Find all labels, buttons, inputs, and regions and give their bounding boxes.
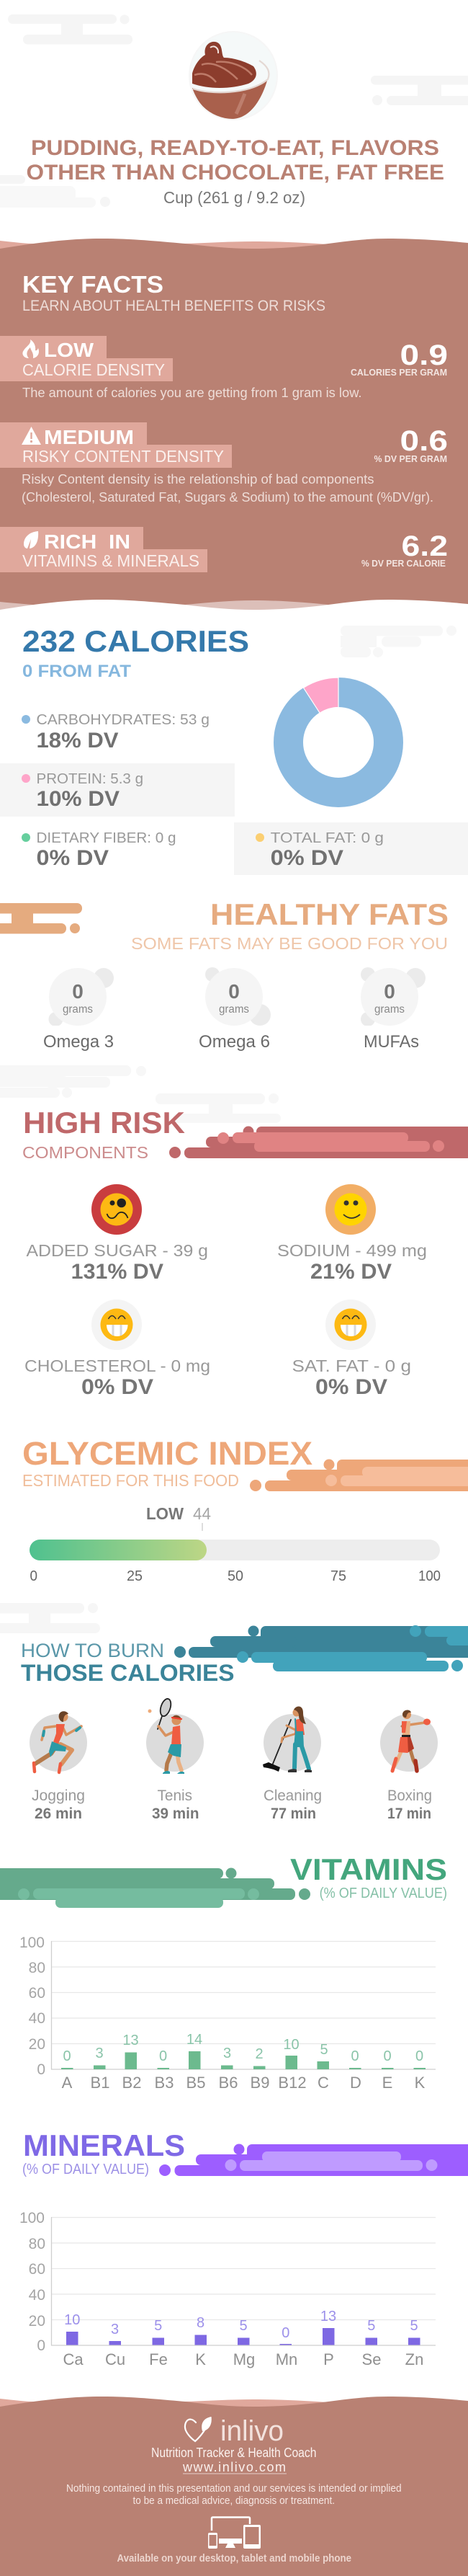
activity: cleaning: Cleaning [264,1787,322,1804]
bar chart: vitamins: 10 [283,2037,300,2053]
stat: omega 6 [199,967,271,1052]
bar chart: minerals: Fe [149,2350,168,2368]
stat: dv per gram [374,425,448,464]
stat: dv per gram: % DV PER GRAM [374,453,447,464]
component: saturated fat: SAT. FAT - 0 g [292,1356,411,1375]
subheading: glycemic index: ESTIMATED FOR THIS FOOD [22,1471,239,1490]
heading: how to burn: HOW TO BURN [21,1640,164,1661]
bar chart: vitamins: E [382,2074,392,2092]
rich in vitamins and minerals [0,527,207,572]
bar chart: minerals [19,2210,436,2368]
bar chart: vitamins: B12 [278,2074,307,2092]
bar chart: minerals: P [323,2350,334,2368]
activity: cleaning: 77 min [271,1806,316,1822]
icon: person sweeping [263,1706,321,1772]
bar chart: minerals: 8 [197,2315,204,2331]
bar chart: minerals: 13 [320,2309,336,2324]
disclaimer: Nothing contained in this presentation and our services is intended or implied [66,2483,402,2495]
stat: dv per gram: 0.6 [400,425,448,457]
bar chart: vitamins: D [350,2074,361,2092]
component: sodium: SODIUM - 499 mg [277,1241,427,1260]
legend: dietary fiber: 0% DV [36,846,109,870]
gauge: glycemic index: 44 [193,1504,211,1523]
label: rich in: RICH IN [44,530,130,553]
stat: omega 3 [43,968,114,1052]
text: risky content note: Risky Content density is the relationship of bad components [22,472,374,487]
icon: devices [208,2517,261,2549]
bar chart: minerals: Zn [405,2350,423,2368]
bar chart: vitamins: B9 [251,2074,269,2092]
stat: calories per gram [351,339,448,378]
component: added sugar: ADDED SUGAR - 39 g [26,1241,208,1260]
bar chart: vitamins: B1 [91,2074,109,2092]
bar chart: vitamins: 0 [415,2048,423,2064]
bar chart: vitamins: 3 [95,2046,104,2061]
stat: dv per calorie: % DV PER CALORIE [361,558,446,569]
legend: carbohydrates: 18% DV [36,729,118,752]
donut chart [288,678,389,793]
disclaimer: to be a medical advice, diagnosis or treatment. [132,2495,335,2507]
icon: grinning face [91,1300,142,1350]
legend: protein [0,763,235,817]
bar chart: vitamins: B5 [186,2074,205,2092]
bar chart: minerals: 5 [367,2318,375,2334]
label: low: LOW [44,339,94,361]
stat: mufas [361,967,426,1052]
bar chart: vitamins: 40 [29,2010,45,2027]
legend: total fat [234,822,468,875]
stat: omega 6: grams [219,1003,249,1016]
component: cholesterol: CHOLESTEROL - 0 mg [24,1356,210,1375]
stat: omega 3: Omega 3 [43,1032,114,1052]
subheading: from fat: 0 FROM FAT [22,662,131,681]
label: risky content density: RISKY CONTENT DENSITY [22,447,224,466]
panel: key facts [0,239,468,620]
bar chart: vitamins: 14 [186,2032,202,2048]
activity: boxing [380,1710,438,1822]
subheading: healthy fats: SOME FATS MAY BE GOOD FOR YOU [131,934,448,953]
bar chart: vitamins: 60 [29,1985,45,2002]
bar chart: minerals: 5 [239,2318,248,2334]
title [26,136,444,185]
image: pudding in glass bowl [189,31,278,120]
gauge: glycemic index [30,1504,441,1584]
medium risky content density [0,422,232,468]
icon: smiling face [325,1184,376,1235]
availability note: Available on your desktop, tablet and mobile phone [117,2552,351,2564]
subheading: minerals unit: (% OF DAILY VALUE) [22,2162,149,2177]
legend: dietary fiber [22,830,176,870]
bar chart: minerals: 100 [19,2210,45,2226]
bar chart: vitamins: 0 [159,2048,167,2064]
stat: mufas: MUFAs [364,1032,419,1052]
bar chart: minerals: Cu [105,2350,125,2368]
bar chart: minerals: 5 [410,2318,418,2334]
bar chart: minerals: 60 [29,2261,45,2278]
component: sodium [277,1184,427,1284]
subheading: LEARN ABOUT HEALTH BENEFITS OR RISKS [22,298,325,314]
stat: mufas: 0 [384,980,395,1003]
component: cholesterol: 0% DV [81,1375,153,1399]
legend: carbohydrates [22,711,210,752]
bar chart: vitamins: B6 [219,2074,238,2092]
label: calorie density: CALORIE DENSITY [22,360,165,379]
bar chart: vitamins: 0 [37,2061,45,2078]
bar chart: vitamins [19,1935,436,2092]
gauge: glycemic index: 75 [330,1568,346,1584]
icon: grinning face [325,1300,376,1350]
bar chart: vitamins: 0 [63,2048,71,2064]
bar chart: vitamins: 20 [29,2036,45,2053]
bar chart: vitamins: 3 [223,2046,231,2061]
icon: tennis player [146,1697,204,1774]
gauge: glycemic index: 0 [30,1568,37,1584]
gauge: glycemic index: LOW [146,1504,184,1523]
title: PUDDING, READY-TO-EAT, FLAVORS [31,136,439,160]
bar chart: minerals: 20 [29,2313,45,2329]
bar chart: vitamins: 80 [29,1960,45,1976]
component: added sugar [26,1184,208,1284]
activity: jogging [30,1711,87,1822]
bar chart: vitamins: B3 [155,2074,174,2092]
bar chart: minerals: 5 [154,2318,162,2334]
bar chart: vitamins: 5 [320,2042,328,2058]
legend: protein: 10% DV [36,787,120,811]
heading: calories: 232 CALORIES [22,624,249,658]
low calorie density [0,336,173,381]
activity: tennis [146,1697,204,1822]
heading: glycemic index: GLYCEMIC INDEX [22,1435,312,1472]
bar chart: minerals: Mn [276,2350,297,2368]
legend: protein: PROTEIN: 5.3 g [36,770,143,787]
stat: omega 3: grams [63,1003,93,1016]
heading: those calories: THOSE CALORIES [21,1660,235,1686]
bar chart: vitamins: 0 [383,2048,392,2064]
component: added sugar: 131% DV [71,1260,163,1284]
website link: www.inlivo.com [182,2460,286,2474]
icon: leaf [24,531,38,548]
subheading: vitamins unit: (% OF DAILY VALUE) [320,1886,447,1901]
bar chart: minerals: 3 [111,2322,119,2337]
heading: vitamins: VITAMINS [290,1852,447,1886]
legend: dietary fiber: DIETARY FIBER: 0 g [36,830,176,846]
bar chart: minerals: Ca [63,2350,84,2368]
icon: boxer [380,1710,438,1772]
gauge: glycemic index: 25 [127,1568,143,1584]
bar chart: minerals: Se [362,2350,381,2368]
bar chart: minerals: Mg [233,2350,255,2368]
activity: tennis: Tenis [157,1787,192,1804]
activity: jogging: Jogging [32,1787,85,1804]
icon: flame [22,339,39,358]
heading: high risk: HIGH RISK [23,1106,185,1140]
legend: carbohydrates: CARBOHYDRATES: 53 g [36,711,210,728]
label: medium: MEDIUM [44,426,134,448]
activity: boxing: Boxing [387,1787,432,1804]
gauge: glycemic index: 100 [418,1568,441,1584]
bar chart: vitamins: 0 [351,2048,359,2064]
bar chart: minerals: 0 [37,2337,45,2354]
icon: worried face [91,1184,142,1235]
bar chart: minerals: 80 [29,2236,45,2252]
logo: inlivo [185,2415,284,2447]
component: saturated fat [292,1300,411,1399]
serving size: Cup (261 g / 9.2 oz) [163,188,305,207]
bar chart: vitamins: K [415,2074,426,2092]
bar chart: minerals: 0 [282,2325,289,2341]
bar chart: vitamins: 13 [122,2033,139,2048]
stat: calories per gram: 0.9 [400,339,448,371]
activity: boxing: 17 min [387,1806,431,1822]
bar chart: vitamins: A [62,2074,73,2092]
panel: footer [0,2397,468,2576]
text: risky content note [22,472,433,505]
subheading: components: COMPONENTS [22,1143,148,1162]
stat: mufas: grams [374,1003,405,1016]
component: sodium: 21% DV [310,1260,392,1284]
bar chart: minerals: 10 [64,2312,80,2328]
stat: calories per gram: CALORIES PER GRAM [351,367,447,378]
bar chart: vitamins: C [318,2074,329,2092]
bar chart: vitamins: B2 [122,2074,141,2092]
component: cholesterol [24,1300,210,1399]
activity: tennis: 39 min [152,1806,199,1822]
stat: omega 6: 0 [228,980,240,1003]
text: risky content note: (Cholesterol, Saturated Fat, Sugars & Sodium) to the amount (%DV/gr). [22,490,433,505]
bar chart: vitamins: 100 [19,1935,45,1951]
bar chart: vitamins: 2 [255,2046,264,2062]
logo: inlivo: inlivo [220,2415,284,2447]
heading: key facts: KEY FACTS [22,271,163,298]
text: calorie density note: The amount of calories you are getting from 1 gram is low. [22,386,361,400]
stat: dv per calorie [361,530,448,569]
gauge: glycemic index: 50 [228,1568,243,1584]
legend: total fat: 0% DV [271,846,343,870]
heading: minerals: MINERALS [23,2128,185,2162]
stat: dv per calorie: 6.2 [402,530,448,562]
icon: warning [22,427,41,445]
disclaimer [66,2483,402,2507]
heading: healthy fats: HEALTHY FATS [210,897,449,931]
stat: omega 6: Omega 6 [199,1032,270,1052]
component: saturated fat: 0% DV [315,1375,387,1399]
legend: total fat: TOTAL FAT: 0 g [271,830,384,846]
tagline: Nutrition Tracker & Health Coach [151,2446,317,2460]
label: vitamins and minerals: VITAMINS & MINERALS [22,551,199,570]
activity: cleaning [263,1706,322,1822]
title: OTHER THAN CHOCOLATE, FAT FREE [26,161,444,185]
bar chart: minerals: 40 [29,2287,45,2304]
icon: jogger [30,1711,87,1772]
activity: jogging: 26 min [35,1806,82,1822]
bar chart: minerals: K [195,2350,206,2368]
stat: omega 3: 0 [72,980,84,1003]
